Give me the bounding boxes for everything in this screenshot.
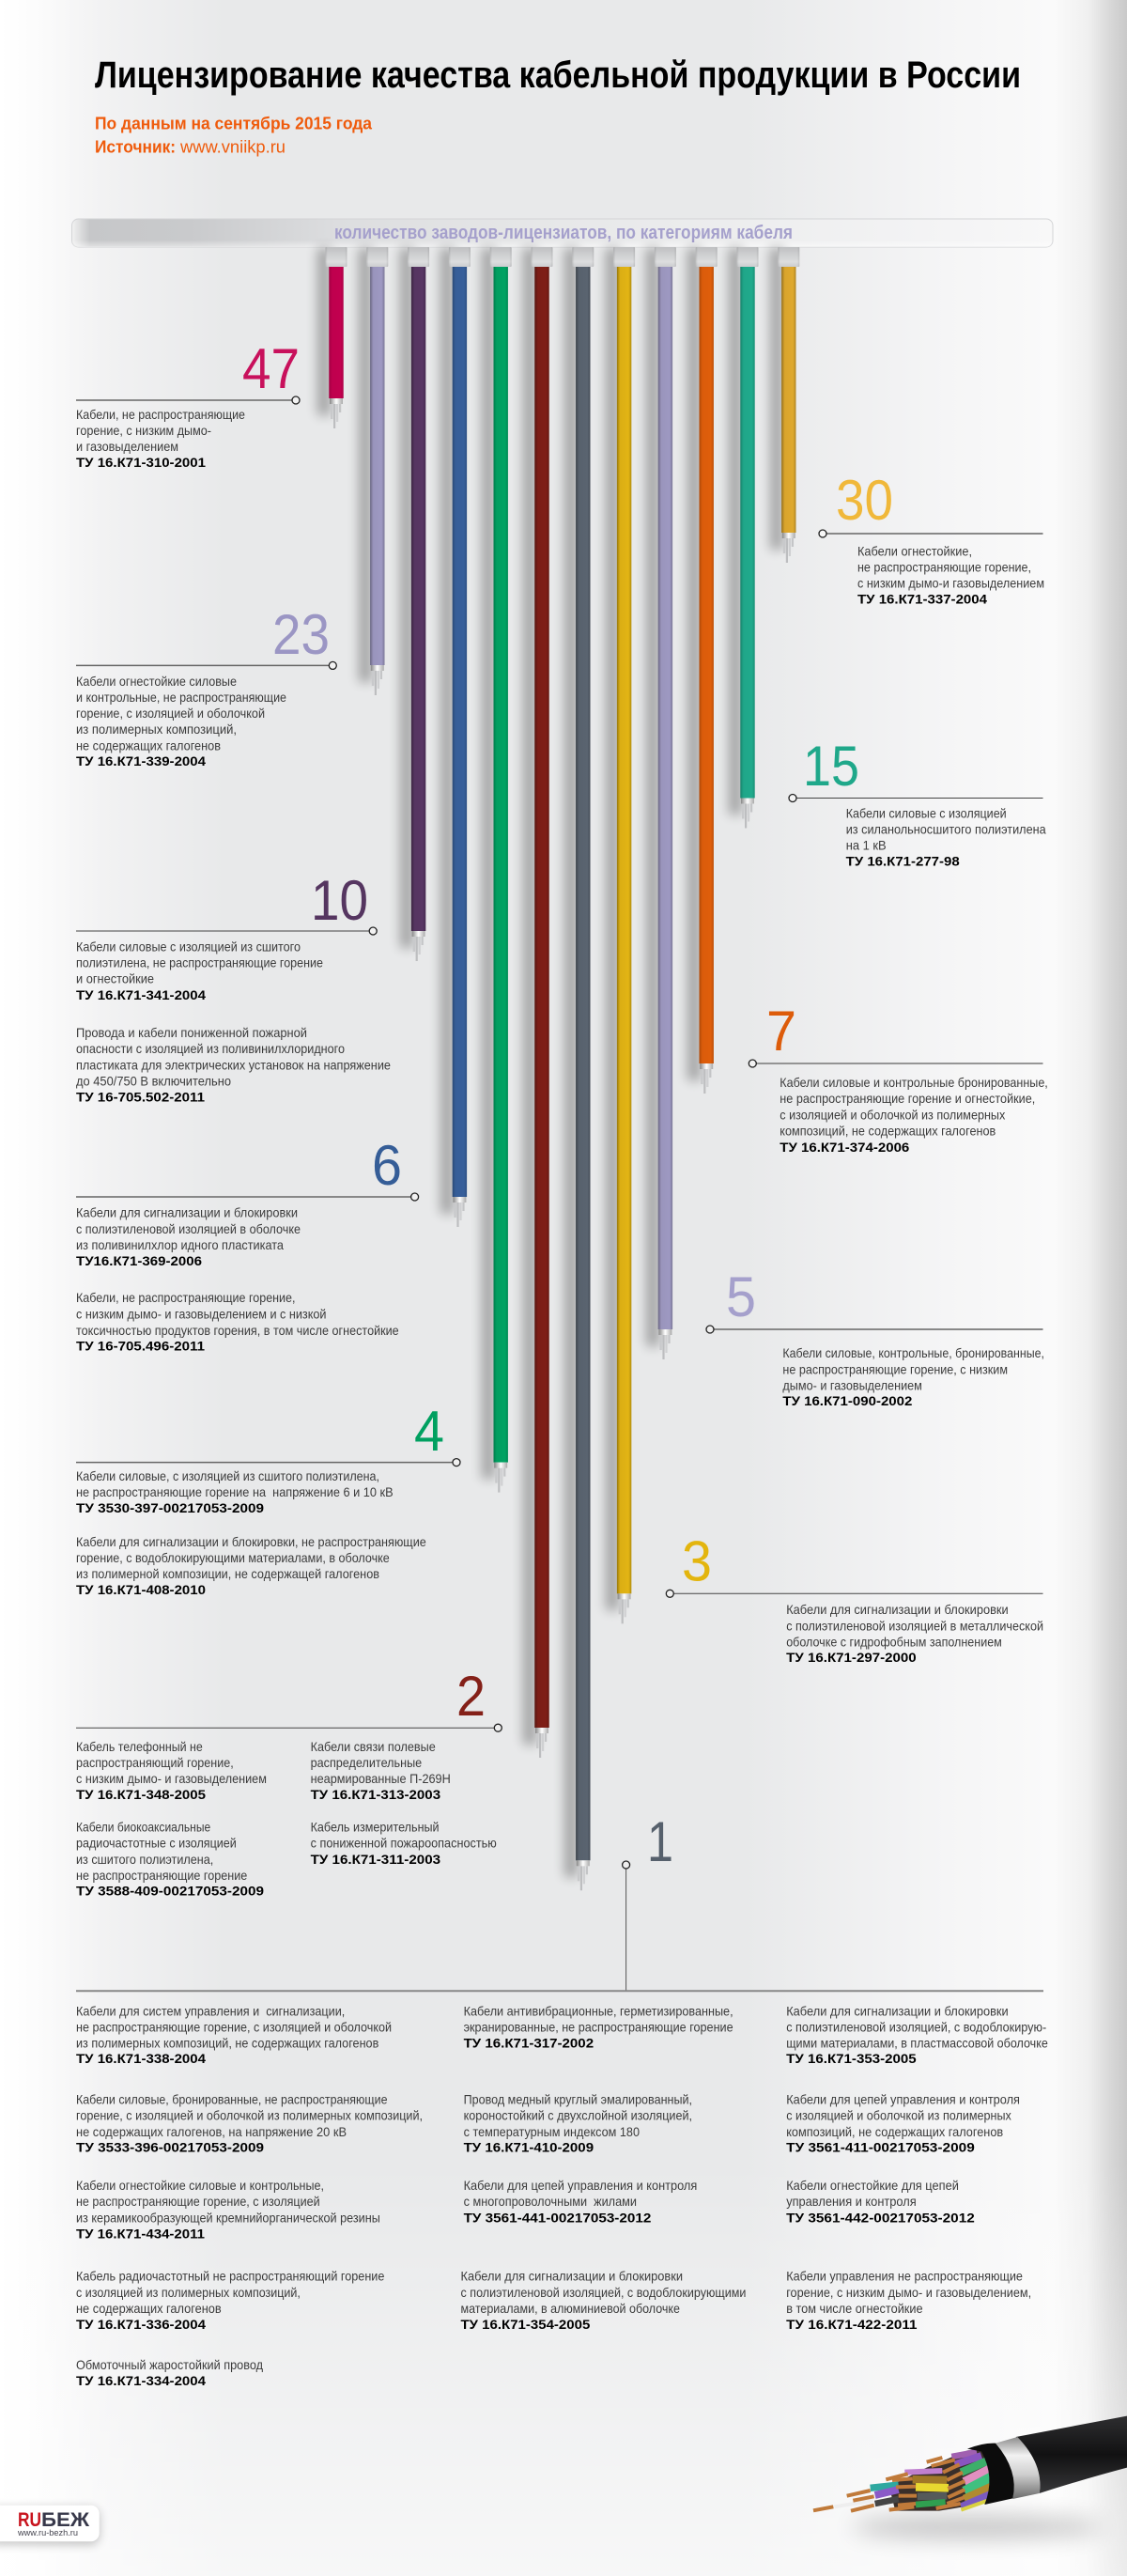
description 2: biaxial cable: из сшитого полиэтилена, xyxy=(76,1852,213,1867)
number 10: 10 xyxy=(311,869,368,932)
panel: 23 xyxy=(76,603,336,768)
list row 2 column A: ТУ 3533-396-00217053-2009 xyxy=(76,2140,264,2155)
logo: RUБЕЖ: www.ru-bezh.ru xyxy=(17,2528,78,2538)
description 15: на 1 кВ xyxy=(846,838,887,853)
description 47: и газовыделением xyxy=(76,439,178,454)
panel: 1 xyxy=(76,1810,1048,2388)
leader line 6 xyxy=(76,1193,419,1201)
description 2: measuring cable: с пониженной пожароопасностью xyxy=(311,1836,497,1851)
list row 3 column A xyxy=(76,2178,380,2242)
description 6 second xyxy=(76,1290,399,1353)
description 7: композиций, не содержащих галогенов xyxy=(780,1124,996,1139)
list row 1 column A: ТУ 16.К71-338-2004 xyxy=(76,2051,206,2066)
description 5: ТУ 16.К71-090-2002 xyxy=(782,1393,913,1408)
list row 1 column B: Кабели антивибрационные, герметизированные, xyxy=(464,2003,733,2018)
list row 1 column B: экранированные, не распространяющие горение xyxy=(464,2020,733,2035)
cable 2 dark red xyxy=(534,267,549,1758)
description 2: telephone cable: ТУ 16.К71-348-2005 xyxy=(76,1787,206,1802)
description 7: Кабели силовые и контрольные бронированные, xyxy=(780,1075,1048,1090)
list row 4 column B: ТУ 16.К71-354-2005 xyxy=(460,2317,591,2332)
number 2: 2 xyxy=(456,1665,486,1728)
cable 1 slate xyxy=(576,267,590,1890)
list row 4 column B: Кабели для сигнализации и блокировки xyxy=(460,2268,683,2283)
description 5: Кабели силовые, контрольные, бронированные, xyxy=(782,1345,1044,1360)
description 6 first: Кабели для сигнализации и блокировки xyxy=(76,1204,298,1219)
description 23: ТУ 16.К71-339-2004 xyxy=(76,753,206,768)
leader line 4 xyxy=(76,1459,460,1466)
description 3: с полиэтиленовой изоляцией в металлической xyxy=(786,1618,1043,1633)
description 6 first: из поливинилхлор идного пластиката xyxy=(76,1237,284,1252)
description 3: Кабели для сигнализации и блокировки xyxy=(786,1602,1009,1617)
description 23: горение, с изоляцией и оболочкой xyxy=(76,706,265,721)
description 15: Кабели силовые с изоляцией xyxy=(846,806,1007,821)
subtitle: date and source xyxy=(95,115,373,156)
cable chart: 12 hanging cables xyxy=(317,247,799,1890)
cable 10 purple xyxy=(411,267,425,961)
description 10 first: Кабели силовые с изоляцией из сшитого xyxy=(76,939,301,954)
description 47: Кабели, не распространяющие xyxy=(76,407,245,422)
description 5: дымо- и газовыделением xyxy=(782,1377,922,1392)
description 6 first xyxy=(76,1204,301,1268)
subtitle: date and source: По данным на сентябрь 2015 года xyxy=(95,115,373,133)
description 10 second: опасности с изоляцией из поливинилхлоридного xyxy=(76,1041,345,1056)
description 30 xyxy=(857,543,1044,607)
description 23 xyxy=(76,674,286,768)
description 4 first: Кабели силовые, с изоляцией из сшитого полиэтилена, xyxy=(76,1468,379,1483)
description 6 second: токсичностью продуктов горения, в том числе огнестойкие xyxy=(76,1323,399,1338)
number 6: 6 xyxy=(372,1134,402,1197)
description 2: field communication cable: распределительные xyxy=(311,1755,422,1770)
leader line 23 xyxy=(76,661,336,669)
logo: RUБЕЖ: БЕЖ xyxy=(41,2509,90,2531)
list row 5 column A: ТУ 16.К71-334-2004 xyxy=(76,2373,206,2388)
cable 5 lavender xyxy=(658,267,672,1359)
cable 47 crimson xyxy=(329,267,344,428)
description 4 first: не распространяющие горение на напряжение 6 и 10 кВ xyxy=(76,1484,394,1499)
description 2: biaxial cable: ТУ 3588-409-00217053-2009 xyxy=(76,1883,264,1898)
panel: 10 xyxy=(76,869,391,1105)
list row 1 column B xyxy=(464,2003,733,2050)
description 3 xyxy=(786,1602,1043,1665)
list row 3 column C: ТУ 3561-442-00217053-2012 xyxy=(786,2210,975,2225)
list row 1 column B: ТУ 16.К71-317-2002 xyxy=(464,2035,594,2050)
description 10 second xyxy=(76,1025,391,1105)
number 47: 47 xyxy=(242,337,300,400)
description 4 first: ТУ 3530-397-00217053-2009 xyxy=(76,1500,264,1515)
description 2: field communication cable: ТУ 16.К71-313-2003 xyxy=(311,1787,440,1802)
list row 1 column A: из полимерных композиций, не содержащих галогенов xyxy=(76,2035,378,2050)
panel: 6 xyxy=(76,1134,419,1353)
list row 4 column B xyxy=(460,2268,746,2332)
description 10 second: ТУ 16-705.502-2011 xyxy=(76,1090,205,1105)
panel: 5 xyxy=(706,1265,1044,1408)
number 3: 3 xyxy=(682,1529,712,1593)
leader line 5 xyxy=(706,1326,1042,1333)
description 10 second: до 450/750 В включительно xyxy=(76,1073,231,1088)
panel: 15 xyxy=(789,735,1046,868)
list row 2 column C: с изоляцией и оболочкой из полимерных xyxy=(786,2108,1011,2123)
illustration: multi-core cable xyxy=(813,2416,1127,2538)
list row 3 column C xyxy=(786,2178,975,2225)
list row 4 column B: с полиэтиленовой изоляцией, с водоблокирующими xyxy=(460,2285,746,2300)
list row 2 column C xyxy=(786,2091,1020,2155)
description 3: оболочке с гидрофобным заполнением xyxy=(786,1635,1002,1650)
description 2: field communication cable: Кабели связи полевые xyxy=(311,1739,436,1754)
description 2: telephone cable: Кабель телефонный не xyxy=(76,1739,203,1754)
subtitle: date and source: Источник: xyxy=(95,137,176,156)
description 5 xyxy=(782,1345,1044,1408)
description 7: ТУ 16.К71-374-2006 xyxy=(780,1140,910,1155)
number 15: 15 xyxy=(803,735,859,798)
list row 2 column A: не содержащих галогенов, на напряжение 20 кВ xyxy=(76,2124,347,2139)
cable 23 lavender xyxy=(370,267,385,695)
leader line 30 xyxy=(819,530,1042,537)
list row 2 column B: короностойкий с двухслойной изоляцией, xyxy=(464,2108,692,2123)
list row 2 column C: Кабели для цепей управления и контроля xyxy=(786,2091,1020,2106)
list row 4 column C: ТУ 16.К71-422-2011 xyxy=(786,2317,918,2332)
list row 1 column C: Кабели для сигнализации и блокировки xyxy=(786,2003,1009,2018)
list row 3 column B: ТУ 3561-441-00217053-2012 xyxy=(464,2210,652,2225)
bar caption: количество заводов-лицензиатов, по категориям кабеля xyxy=(334,223,793,243)
description 10 first: ТУ 16.К71-341-2004 xyxy=(76,987,206,1002)
description 47 xyxy=(76,407,245,470)
number 23: 23 xyxy=(272,603,330,666)
list row 3 column B xyxy=(464,2178,697,2225)
description 10 first: и огнестойкие xyxy=(76,971,154,986)
leader line 10 xyxy=(76,927,377,935)
description 2: field communication cable xyxy=(311,1739,451,1802)
description 23: не содержащих галогенов xyxy=(76,738,221,753)
logo: RUБЕЖ: RU xyxy=(18,2509,41,2531)
description 6 second: ТУ 16-705.496-2011 xyxy=(76,1338,205,1353)
list row 3 column C: Кабели огнестойкие для цепей xyxy=(786,2178,959,2193)
cable 15 teal xyxy=(740,267,755,829)
list row 3 column C: управления и контроля xyxy=(786,2194,917,2209)
list row 3 column A: из керамикообразующей кремнийорганической резины xyxy=(76,2210,380,2225)
list row 4 column A: не содержащих галогенов xyxy=(76,2301,222,2316)
description 4 second: из полимерной композиции, не содержащей галогенов xyxy=(76,1566,379,1581)
list row 4 column A xyxy=(76,2268,385,2332)
description 7: с изоляцией и оболочкой из полимерных xyxy=(780,1107,1005,1122)
description 30: не распространяющие горение, xyxy=(857,560,1031,575)
cable 30 gold xyxy=(781,267,796,563)
cable 7 orange xyxy=(699,267,714,1094)
cable 3 yellow xyxy=(617,267,631,1623)
description 4 second: Кабели для сигнализации и блокировки, не распространяющие xyxy=(76,1534,426,1549)
description 2: biaxial cable: Кабели биокоаксиальные xyxy=(76,1819,210,1834)
list row 1 column A: не распространяющие горение, с изоляцией и оболочкой xyxy=(76,2020,392,2035)
description 30: Кабели огнестойкие, xyxy=(857,543,972,558)
list row 1 column C: щими материалами, в пластмассовой оболочке xyxy=(786,2035,1048,2050)
list row 4 column A: Кабель радиочастотный не распространяющий горение xyxy=(76,2268,385,2283)
list row 1 column A xyxy=(76,2003,392,2066)
list row 4 column A: с изоляцией из полимерных композиций, xyxy=(76,2285,301,2300)
list row 3 column B: с многопроволочными жилами xyxy=(464,2194,637,2209)
list row 4 column C: горение, с низким дымо- и газовыделением, xyxy=(786,2285,1031,2300)
description 2: measuring cable: Кабель измерительный xyxy=(311,1819,440,1834)
number 30: 30 xyxy=(836,469,893,532)
number 4: 4 xyxy=(414,1400,444,1463)
description 4 second: горение, с водоблокирующими материалами, в оболочке xyxy=(76,1550,390,1565)
description 23: из полимерных композиций, xyxy=(76,722,237,737)
description 2: biaxial cable: не распространяющие горение xyxy=(76,1868,247,1883)
description 2: telephone cable: распространяющий горение, xyxy=(76,1755,234,1770)
list row 4 column A: ТУ 16.К71-336-2004 xyxy=(76,2317,206,2332)
description 6 second: Кабели, не распространяющие горение, xyxy=(76,1290,295,1305)
list row 2 column B: ТУ 16.К71-410-2009 xyxy=(464,2140,594,2155)
leader line 7 xyxy=(749,1060,1042,1067)
list row 5 column A xyxy=(76,2357,263,2388)
list row 1 column A: Кабели для систем управления и сигнализации, xyxy=(76,2003,345,2018)
description 5: не распространяющие горение, с низким xyxy=(782,1362,1008,1377)
description 6 first: с полиэтиленовой изоляцией в оболочке xyxy=(76,1221,301,1236)
description 15: из силанольносшитого полиэтилена xyxy=(846,821,1046,836)
leader line 2 xyxy=(76,1724,502,1731)
description 4 second: ТУ 16.К71-408-2010 xyxy=(76,1582,206,1597)
number 5: 5 xyxy=(726,1265,756,1328)
list row 2 column A: Кабели силовые, бронированные, не распространяющие xyxy=(76,2091,388,2106)
list row 3 column A: ТУ 16.К71-434-2011 xyxy=(76,2227,205,2242)
description 4 second xyxy=(76,1534,426,1597)
cable 4 green xyxy=(494,267,508,1493)
panel: 3 xyxy=(666,1529,1043,1665)
logo: RUБЕЖ xyxy=(0,2506,100,2545)
list row 3 column A: не распространяющие горение, с изоляцией xyxy=(76,2194,320,2209)
panel: 4 xyxy=(76,1400,460,1597)
number 7: 7 xyxy=(766,1000,796,1063)
leader line 3 xyxy=(666,1590,1042,1597)
description 2: field communication cable: неармированные П-269Н xyxy=(311,1771,451,1786)
list row 3 column B: Кабели для цепей управления и контроля xyxy=(464,2178,697,2193)
description 4 first xyxy=(76,1468,394,1515)
panel: 30 xyxy=(819,469,1044,607)
list row 4 column C xyxy=(786,2268,1031,2332)
description 2: telephone cable: с низким дымо- и газовыделением xyxy=(76,1771,267,1786)
description 47: ТУ 16.К71-310-2001 xyxy=(76,455,206,470)
leader line 1 xyxy=(76,1861,1043,1991)
list row 4 column C: в том числе огнестойкие xyxy=(786,2301,923,2316)
list row 4 column B: материалами, в алюминиевой оболочке xyxy=(460,2301,680,2316)
list row 2 column C: композиций, не содержащих галогенов xyxy=(786,2124,1003,2139)
description 10 second: пластиката для электрических установок на напряжение xyxy=(76,1058,391,1073)
description 2: telephone cable xyxy=(76,1739,267,1802)
description 23: Кабели огнестойкие силовые xyxy=(76,674,237,689)
description 15 xyxy=(846,806,1046,868)
description 10 second: Провода и кабели пониженной пожарной xyxy=(76,1025,307,1040)
description 2: biaxial cable: радиочастотные с изоляцией xyxy=(76,1836,237,1851)
description 2: measuring cable: ТУ 16.К71-311-2003 xyxy=(311,1852,440,1867)
description 23: и контрольные, не распространяющие xyxy=(76,690,286,705)
description 10 first: полиэтилена, не распространяющие горение xyxy=(76,954,323,970)
list row 2 column C: ТУ 3561-411-00217053-2009 xyxy=(786,2140,975,2155)
description 2: biaxial cable xyxy=(76,1819,264,1898)
subtitle: date and source: www.vniikp.ru xyxy=(179,137,286,156)
leader line 15 xyxy=(789,795,1042,802)
panel: 47 xyxy=(76,337,300,470)
list row 2 column A: горение, с изоляцией и оболочкой из полимерных композиций, xyxy=(76,2108,423,2123)
list row 3 column A: Кабели огнестойкие силовые и контрольные, xyxy=(76,2178,324,2193)
description 15: ТУ 16.К71-277-98 xyxy=(846,853,960,868)
description 7: не распространяющие горение и огнестойкие, xyxy=(780,1091,1035,1106)
description 2: measuring cable xyxy=(311,1819,497,1867)
panel: 2 xyxy=(76,1665,502,1898)
list row 2 column A xyxy=(76,2091,423,2155)
cable 6 blue xyxy=(453,267,467,1227)
list row 4 column C: Кабели управления не распространяющие xyxy=(786,2268,1023,2283)
description 30: с низким дымо-и газовыделением xyxy=(857,575,1044,590)
leader line 47 xyxy=(76,396,300,404)
list row 1 column C: ТУ 16.К71-353-2005 xyxy=(786,2051,917,2066)
list row 2 column B: Провод медный круглый эмалированный, xyxy=(464,2091,692,2106)
description 3: ТУ 16.К71-297-2000 xyxy=(786,1650,917,1665)
description 6 first: ТУ16.К71-369-2006 xyxy=(76,1253,202,1268)
list row 1 column C xyxy=(786,2003,1048,2066)
description 30: ТУ 16.К71-337-2004 xyxy=(857,592,987,607)
description 10 first xyxy=(76,939,323,1002)
description 6 second: с низким дымо- и газовыделением и с низкой xyxy=(76,1306,327,1321)
number 1: 1 xyxy=(647,1810,673,1873)
panel: 7 xyxy=(749,1000,1048,1155)
list row 2 column B: с температурным индексом 180 xyxy=(464,2124,640,2139)
description 7 xyxy=(780,1075,1048,1155)
description 47: горение, с низким дымо- xyxy=(76,423,211,438)
list row 2 column B xyxy=(464,2091,692,2155)
list row 1 column C: с полиэтиленовой изоляцией, с водоблокирую- xyxy=(786,2020,1046,2035)
cables rack bar xyxy=(71,219,1053,247)
list row 5 column A: Обмоточный жаростойкий провод xyxy=(76,2357,263,2372)
